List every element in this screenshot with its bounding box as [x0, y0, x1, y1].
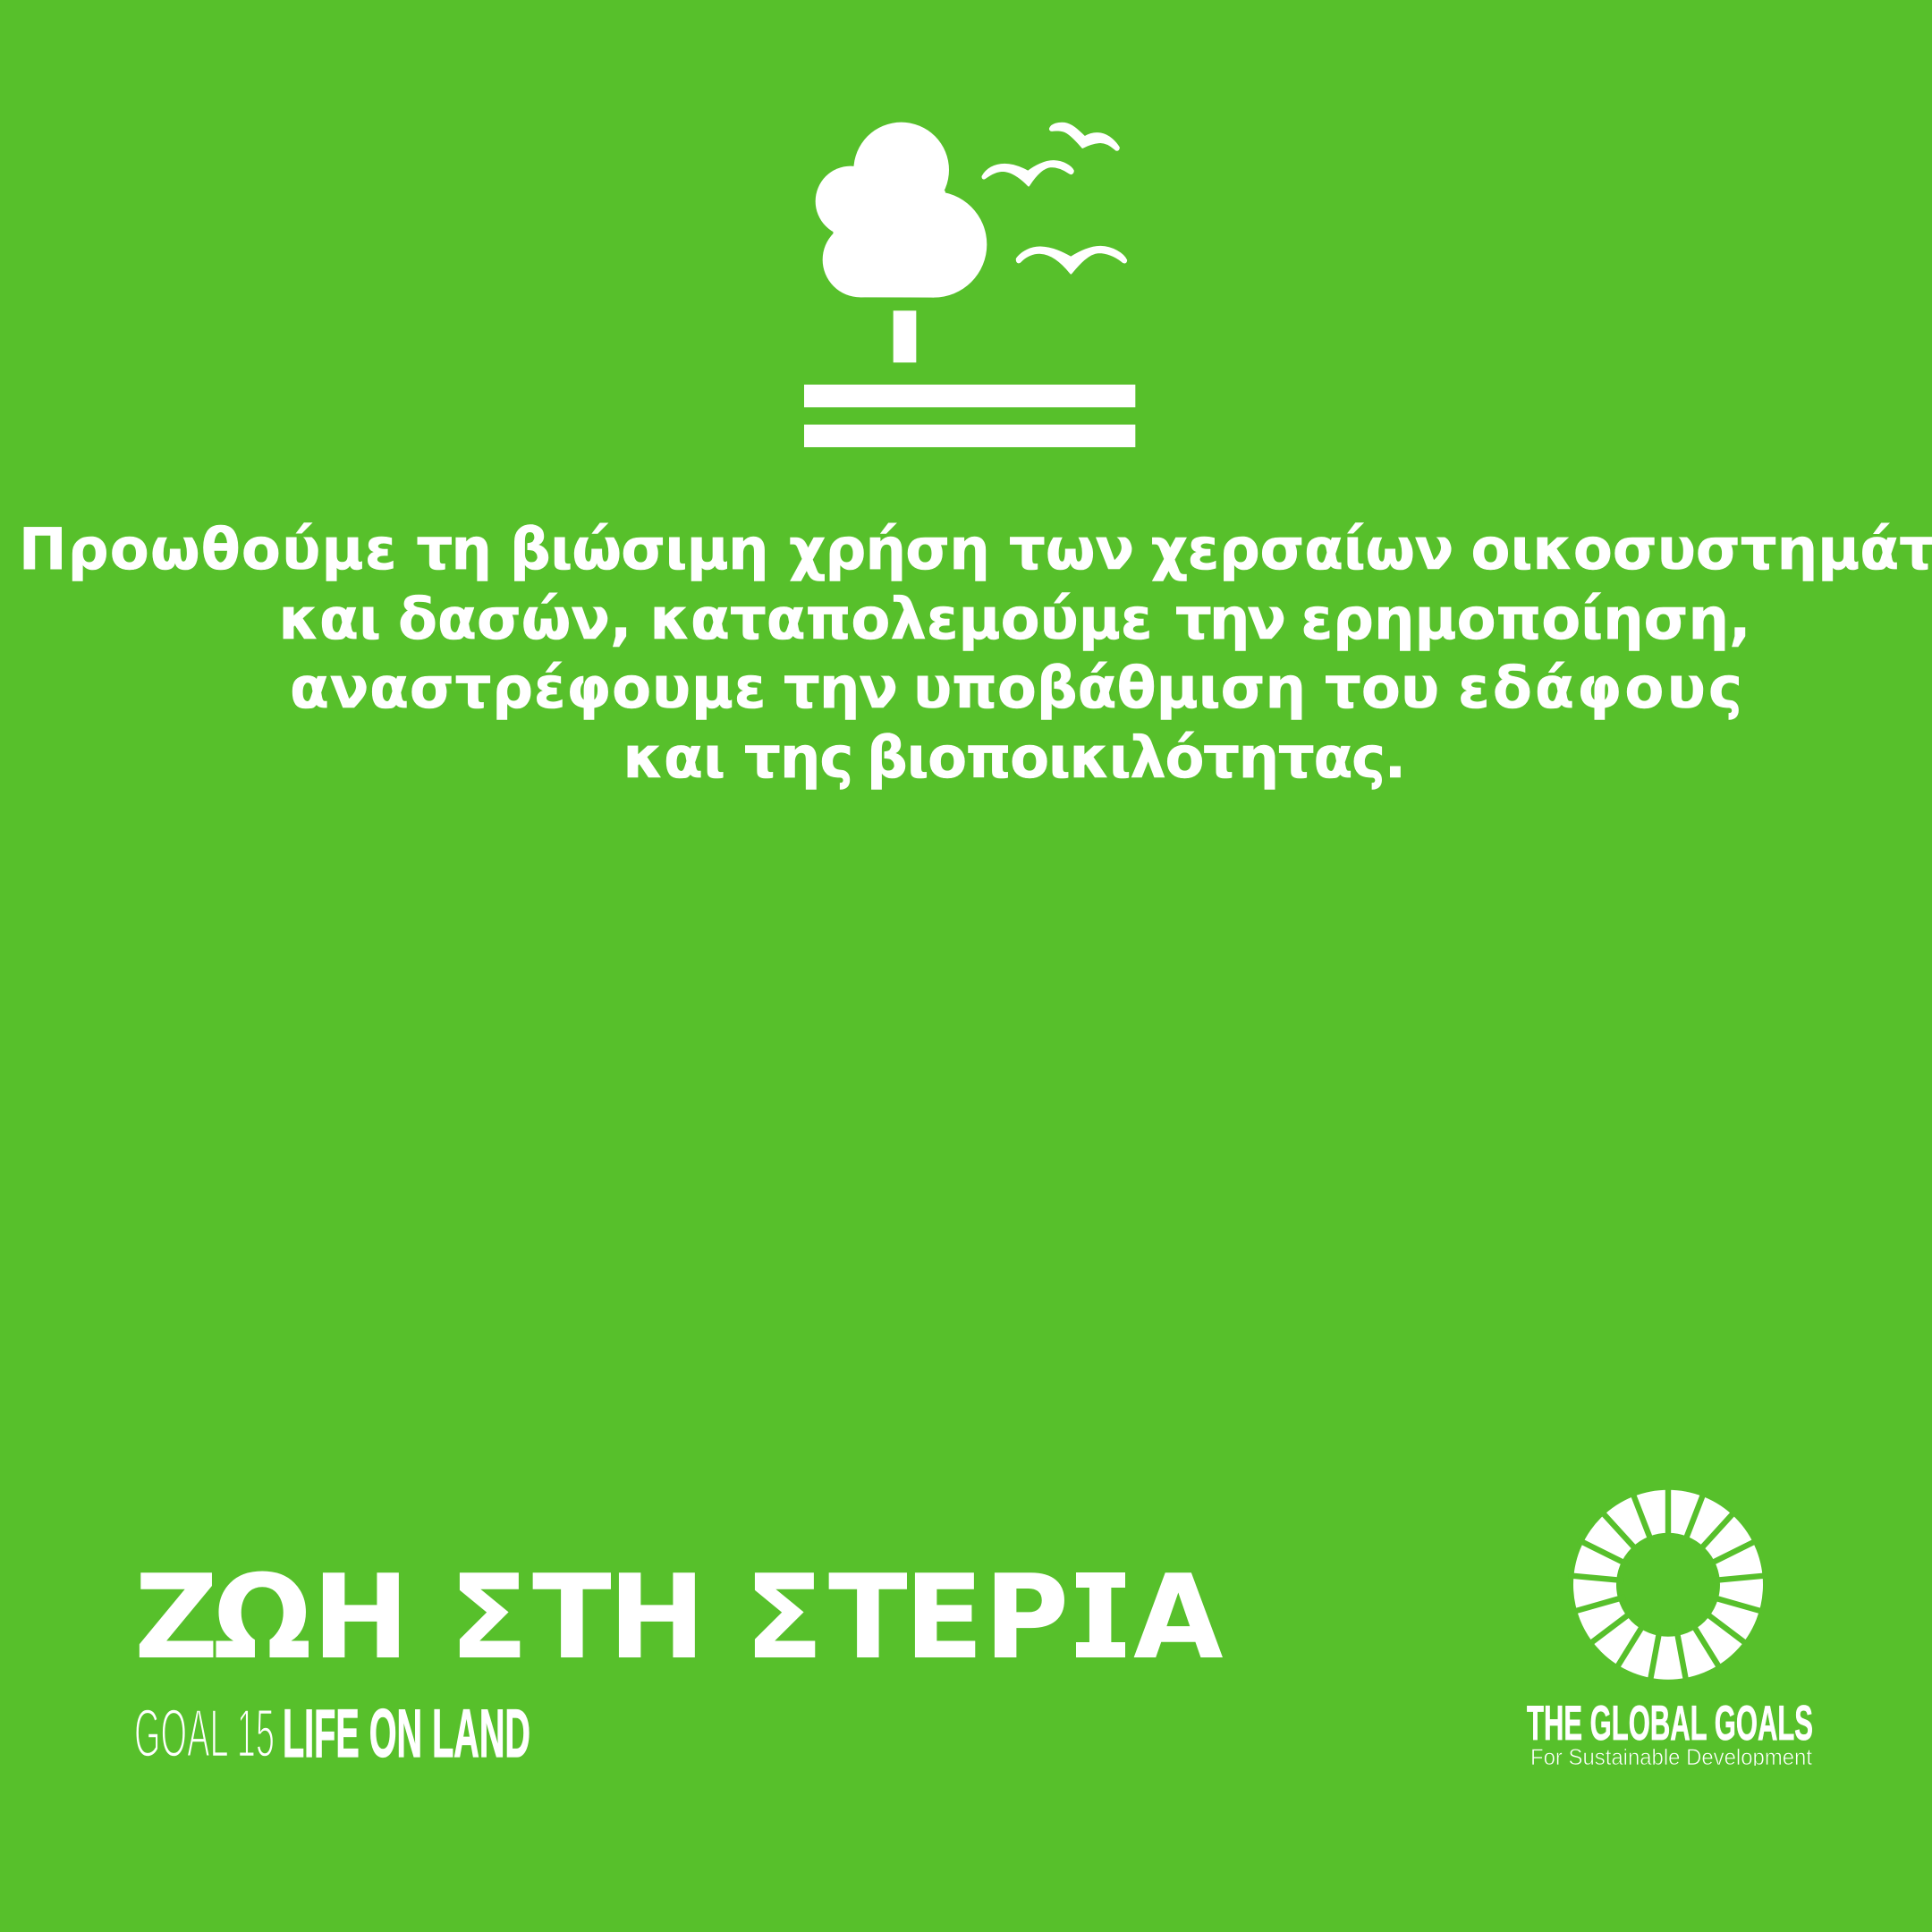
text block: goal description: βιώσιμη — [510, 517, 768, 583]
icon: tree crown — [816, 123, 987, 298]
icon: tree trunk — [894, 310, 916, 362]
logo: global goals wheel — [1568, 1485, 1768, 1683]
text block: goal description: Προωθούμε — [19, 517, 398, 583]
text block: goal description: και — [279, 587, 381, 653]
icon: ground lines — [804, 385, 1135, 447]
goal label: LIFE ON LAND: LIFE ON LAND — [283, 1696, 530, 1772]
text block: goal description: βιοποικιλότητας. — [867, 725, 1405, 792]
icon: bird top — [1050, 123, 1119, 150]
icon: bird lower — [1017, 247, 1126, 273]
text: GOAL 15 — [134, 1696, 275, 1772]
text block: goal description: και — [623, 725, 725, 792]
text block: goal description: την — [1175, 587, 1284, 653]
icon: tree, birds and ground — [804, 123, 1135, 447]
text block: goal description: την — [784, 656, 897, 722]
text block: goal description: της — [744, 725, 852, 792]
text block: goal description — [19, 517, 1932, 792]
text block: goal description: ερημοποίηση, — [1301, 587, 1750, 653]
icon: bird middle — [983, 161, 1073, 185]
text block: goal description: χερσαίων — [1151, 517, 1453, 583]
text block: goal description: των — [1009, 517, 1134, 583]
text block: goal description: δασών, — [398, 587, 631, 653]
title: ΖΩΗ ΣΤΗ ΣΤΕΡΙΑ — [134, 1549, 1224, 1685]
text block: goal description: χρήση — [789, 517, 989, 583]
text block: goal description: τη — [417, 517, 490, 583]
text block: goal description: καταπολεμούμε — [649, 587, 1152, 653]
text block: goal description: του — [1325, 656, 1439, 722]
text block: goal description: εδάφους — [1458, 656, 1745, 722]
text block: goal description: αναστρέφουμε — [290, 656, 767, 722]
text block: goal description: υποβάθμιση — [913, 656, 1306, 722]
